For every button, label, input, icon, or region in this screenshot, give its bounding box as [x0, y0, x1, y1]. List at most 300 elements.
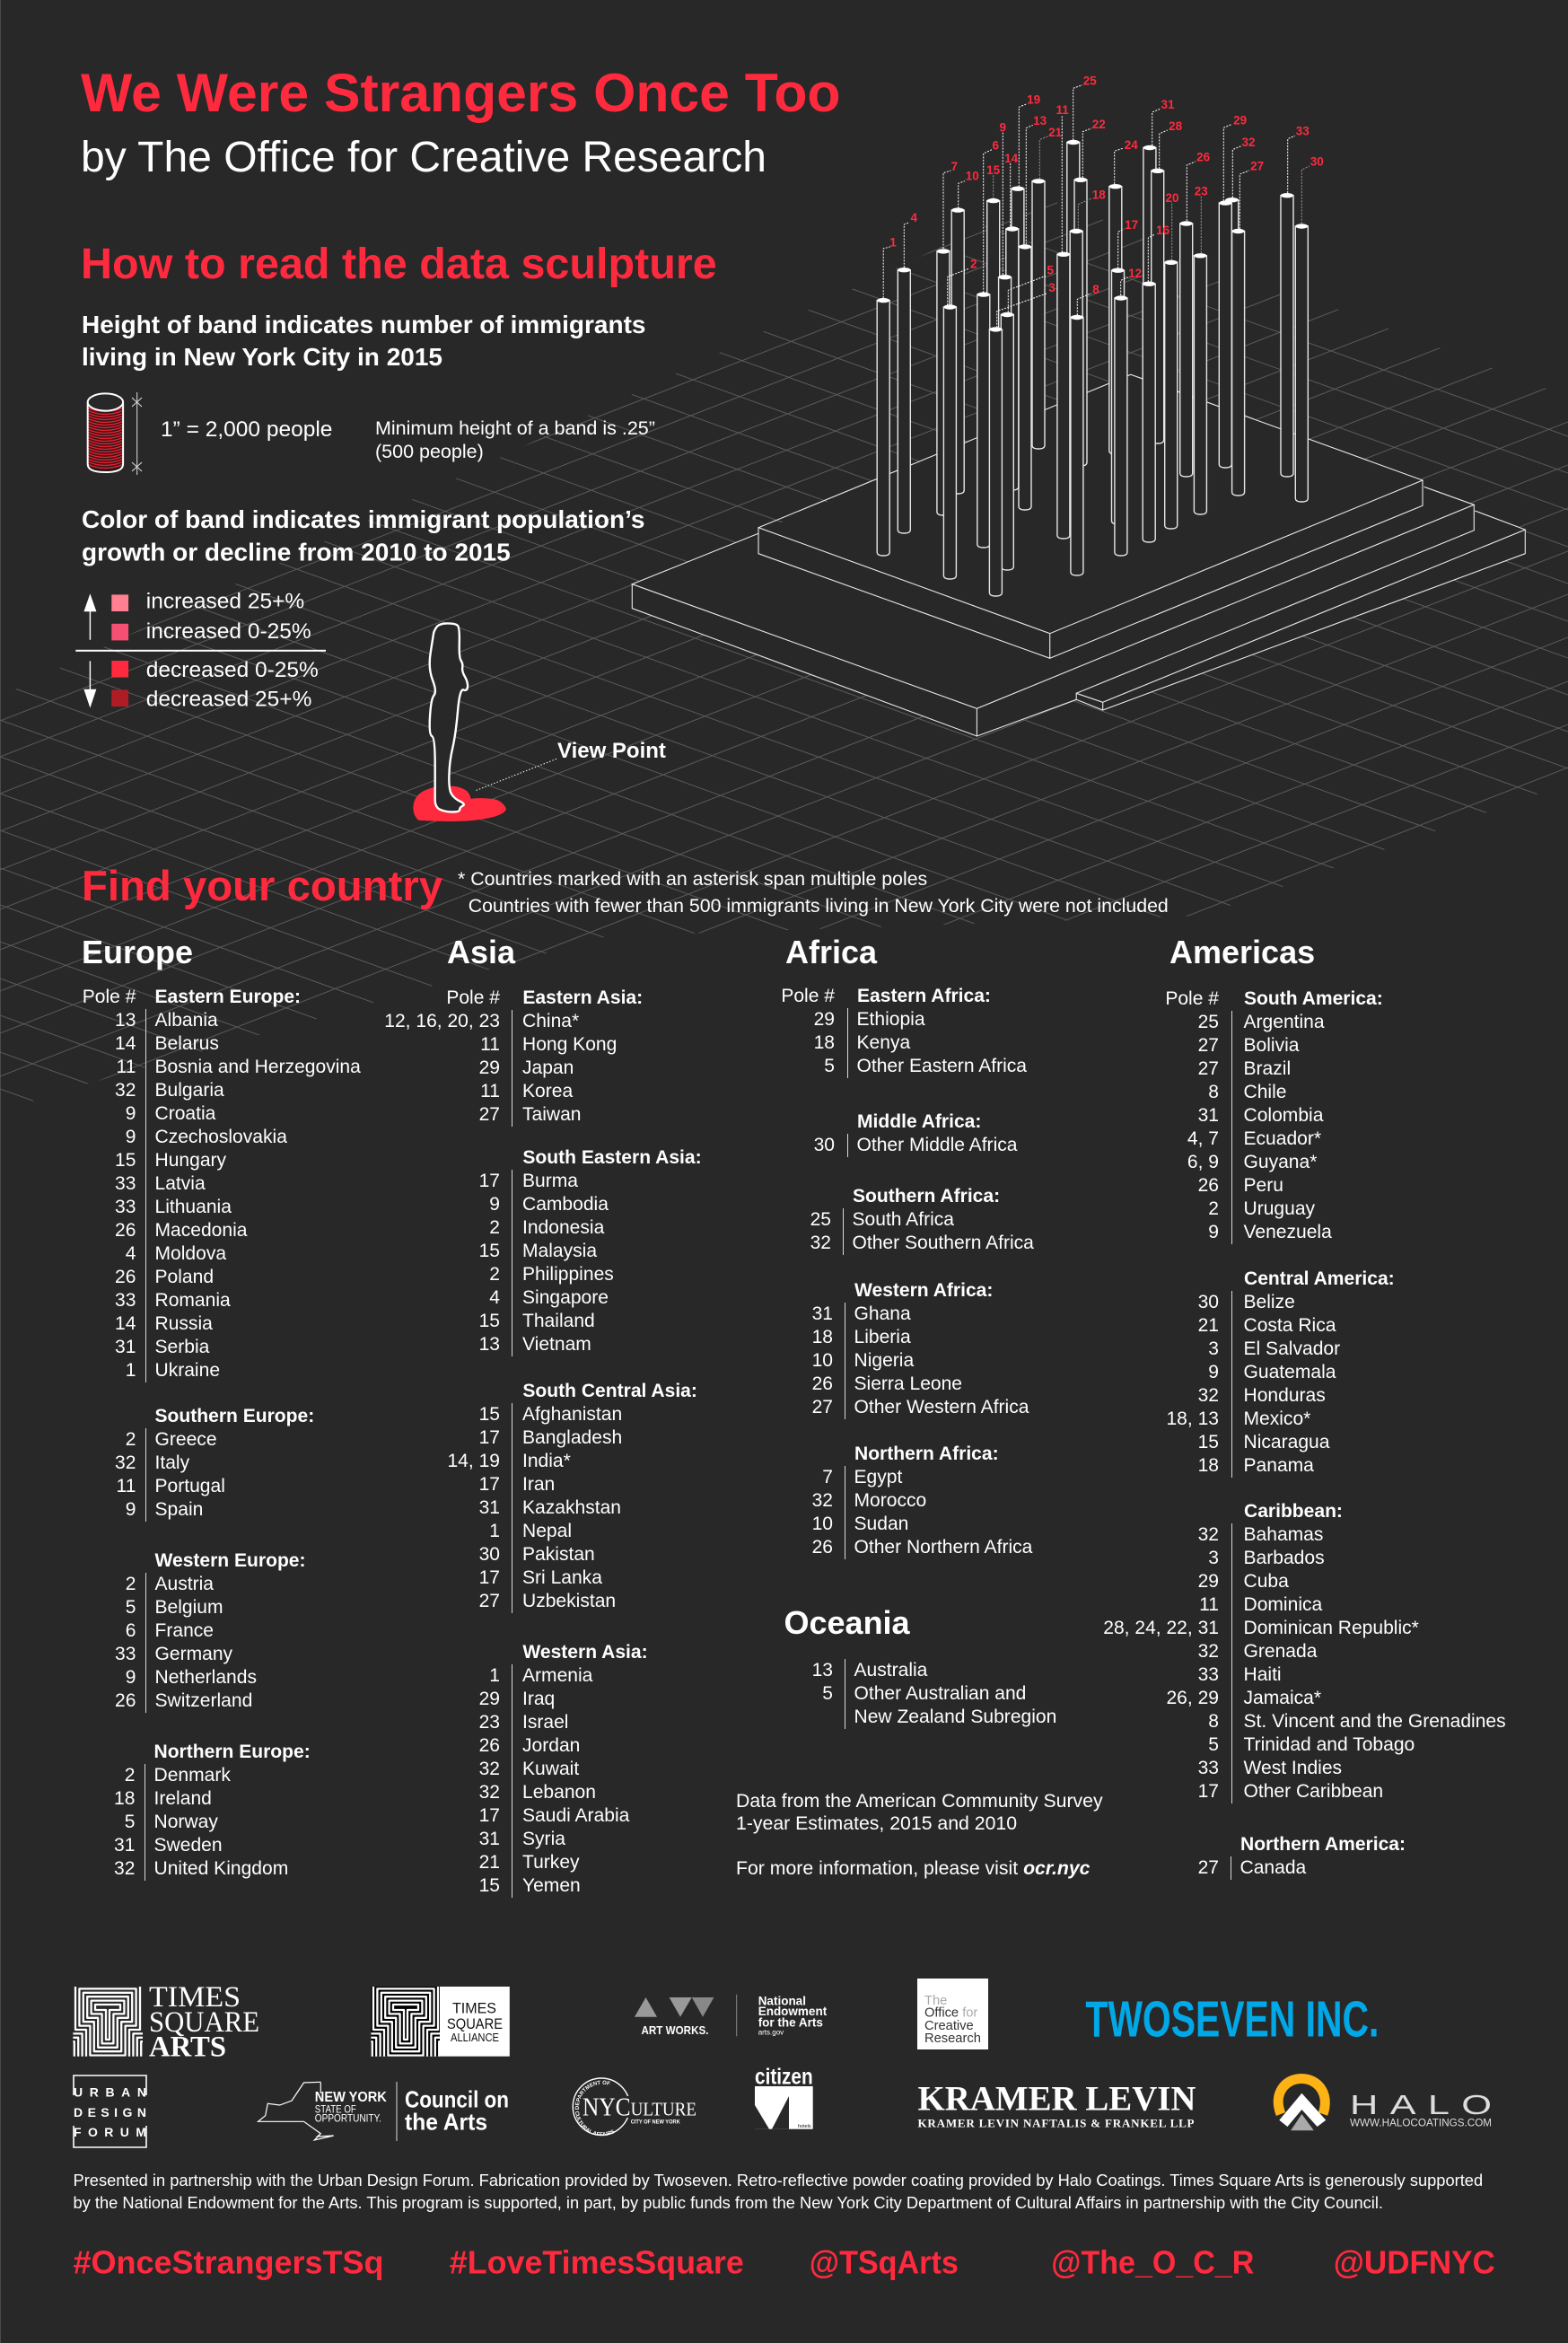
pole 13: 13 [1033, 114, 1047, 127]
list: South Central Asia: Pakistan [522, 1544, 595, 1565]
text: 26 [115, 1220, 136, 1241]
text: 33 [115, 1290, 136, 1311]
text: 28, 24, 22, 31 [1103, 1618, 1219, 1638]
logo: new york council on the arts: OPPORTUNITY. [315, 2111, 381, 2124]
list: Western Europe: France [154, 1620, 214, 1641]
text: 12, 16, 20, 23 [384, 1011, 500, 1031]
logo: times square arts [73, 1987, 258, 2057]
legend: colour scale: decreased 0-25% [146, 658, 319, 682]
list: Central America: Central America: [1244, 1268, 1395, 1289]
heading: Asia: Asia [447, 934, 515, 970]
pole 32 [1226, 136, 1256, 463]
heading: Europe: Europe [82, 934, 193, 970]
legend: colour scale: increased 25+% [146, 589, 304, 614]
text: 14 [115, 1033, 136, 1054]
list: Northern Africa: Morocco [854, 1490, 926, 1510]
text: 32 [1198, 1641, 1219, 1662]
text: 32 [810, 1233, 831, 1253]
text: 27 [479, 1591, 500, 1611]
list: Central America: Panama [1244, 1455, 1314, 1476]
hashtags: #OnceStrangersTSq [74, 2244, 384, 2280]
text: 10 [812, 1350, 833, 1371]
pole 31 [1143, 98, 1175, 417]
list: Caribbean: Trinidad and Tobago [1244, 1734, 1415, 1755]
list: Caribbean [1103, 1501, 1506, 1803]
list: South America: Chile [1244, 1082, 1286, 1102]
text: 17 [479, 1567, 500, 1588]
text: 5 [126, 1597, 136, 1618]
text: Pole # [446, 987, 500, 1008]
text: 33 [115, 1644, 136, 1664]
list: Caribbean: Jamaica* [1244, 1688, 1321, 1708]
text: 29 [814, 1009, 835, 1030]
pole 4: 4 [911, 211, 918, 224]
list: Central America: El Salvador [1244, 1338, 1340, 1359]
logo: office for creative research: Creative [924, 2019, 974, 2033]
list: South Central Asia: Sri Lanka [522, 1567, 602, 1588]
pole 33 [1281, 124, 1310, 477]
list: Caribbean: Bahamas [1244, 1524, 1323, 1545]
logo: citizenM: citizen [755, 2065, 813, 2090]
list: Northern America [1198, 1834, 1406, 1880]
text: 6 [126, 1620, 136, 1641]
text: 9 [126, 1127, 136, 1147]
list: Southern Europe: Portugal [154, 1476, 225, 1496]
logo: nyc culture [573, 2077, 696, 2137]
text: 5 [824, 1056, 835, 1076]
logo: urban design forum: FORUM [74, 2125, 146, 2139]
list: South Eastern Asia: Burma [522, 1171, 578, 1191]
pole 17: 17 [1125, 218, 1138, 232]
pole 3: 3 [1048, 281, 1056, 294]
list: Eastern Europe: Romania [154, 1290, 231, 1311]
list: Western Asia: Western Asia: [522, 1642, 648, 1663]
text: 31 [114, 1835, 135, 1856]
logo: citizenM [755, 2065, 813, 2129]
subtitle: by The Office for Creative Research [81, 134, 766, 181]
list: Northern Africa [812, 1444, 1032, 1559]
list: Eastern Europe: Croatia [154, 1103, 215, 1124]
list: Western Africa: Ghana [854, 1303, 911, 1324]
pole 26: 26 [1196, 151, 1211, 163]
logo: kramer levin: KRAMER LEVIN NAFTALIS & FRANKEL LLP [917, 2116, 1195, 2129]
list: Southern Africa: Other Southern Africa [853, 1233, 1034, 1253]
list: Eastern Europe: Hungary [154, 1150, 226, 1171]
list: Eastern Europe: Serbia [154, 1337, 209, 1357]
pole 15: 15 [986, 163, 1001, 177]
list: Eastern Europe [83, 987, 361, 1382]
pole 14 [1004, 152, 1019, 490]
list: Eastern Europe: Eastern Europe: [154, 987, 301, 1007]
text: 23 [479, 1712, 500, 1733]
legend: colour scale: increased 0-25% [146, 619, 311, 644]
text: 17 [479, 1474, 500, 1495]
icon: view point heart [413, 786, 506, 821]
list: South America: Brazil [1244, 1058, 1291, 1079]
list: Western Europe: Switzerland [154, 1690, 252, 1711]
list: Middle Africa: Middle Africa: [857, 1111, 981, 1132]
text: 31 [479, 1829, 500, 1849]
list: Western Asia: Israel [522, 1712, 568, 1733]
text: 17 [479, 1805, 500, 1826]
text: 13 [115, 1010, 136, 1031]
text: 27 [1198, 1857, 1219, 1878]
text: 17 [479, 1171, 500, 1191]
text: 8 [1208, 1711, 1219, 1732]
text: 2 [125, 1765, 135, 1786]
pole 31: 31 [1161, 98, 1175, 111]
list: Oceania: Australia [854, 1660, 927, 1680]
pole 10: 10 [966, 169, 979, 183]
list: Eastern Asia: Eastern Asia: [522, 987, 643, 1008]
pole 18: 18 [1092, 189, 1106, 201]
text: 14 [115, 1313, 136, 1334]
list: Western Europe: Netherlands [154, 1667, 257, 1688]
text: 29 [479, 1689, 500, 1709]
heading: find your country: Find your country [82, 863, 443, 910]
pole 2 [943, 257, 977, 579]
text: 15 [479, 1241, 500, 1261]
list: Northern Europe: Norway [154, 1812, 218, 1832]
text: 26 [115, 1267, 136, 1287]
list: Northern America: Northern America: [1240, 1834, 1406, 1855]
text: 32 [479, 1782, 500, 1803]
pole 1 [877, 235, 897, 556]
pole 21 [1032, 126, 1063, 449]
pole 25: 25 [1083, 74, 1097, 88]
text: 15 [115, 1150, 136, 1171]
list: South Central Asia: Uzbekistan [522, 1591, 616, 1611]
logo: times square alliance: TIMES [452, 2000, 496, 2016]
list: Caribbean: Barbados [1244, 1548, 1325, 1568]
list: Southern Africa: Southern Africa: [853, 1186, 1000, 1207]
text: 33 [115, 1173, 136, 1194]
hashtags: @UDFNYC [1334, 2244, 1495, 2280]
text: 9 [1208, 1222, 1219, 1242]
pole 25 [1067, 74, 1097, 412]
text: 32 [114, 1858, 135, 1879]
list: Middle Africa: Other Middle Africa [856, 1135, 1017, 1155]
list: Caribbean: Caribbean: [1244, 1501, 1343, 1522]
list: Western Africa: Other Western Africa [854, 1397, 1029, 1417]
note: countries: Countries with fewer than 500 immigrants living in New York City were not included [469, 895, 1169, 917]
text: data source: Data from the American Community Survey [736, 1790, 1103, 1812]
pole 21: 21 [1048, 126, 1063, 139]
text: 2 [489, 1217, 500, 1238]
logo: urban design forum: DESIGN [74, 2105, 146, 2119]
text: 18 [814, 1032, 835, 1053]
list: Western Africa: Nigeria [854, 1350, 914, 1371]
list: Western Europe: Western Europe: [154, 1550, 306, 1571]
text: 33 [1198, 1758, 1219, 1778]
list: South America: Venezuela [1244, 1222, 1332, 1242]
text: 31 [115, 1337, 136, 1357]
list: Western Europe [115, 1550, 306, 1713]
logo: nyc culture: DEPARTMENT OF [574, 2081, 610, 2110]
text: 18 [1198, 1455, 1219, 1476]
list: Eastern Europe: Latvia [154, 1173, 206, 1194]
heading: Africa: Africa [785, 934, 877, 970]
logo: times square alliance [371, 1987, 510, 2057]
list: Caribbean: West Indies [1244, 1758, 1342, 1778]
pole 32: 32 [1241, 136, 1256, 149]
list: Western Asia: Lebanon [522, 1782, 596, 1803]
hashtags: @The_O_C_R [1051, 2244, 1255, 2280]
logo: new york council on the arts: the Arts [405, 2109, 487, 2136]
logo: urban design forum: URBAN [74, 2084, 146, 2099]
list: Southern Europe: Spain [154, 1499, 203, 1520]
list: Central America: Guatemala [1244, 1362, 1336, 1382]
logo: national endowment for the arts: Endowment [758, 2005, 828, 2018]
text: 11 [480, 1081, 500, 1101]
logo: office for creative research: Office for [924, 2006, 977, 2021]
list: Northern Europe: Ireland [154, 1788, 212, 1809]
list: Caribbean: St. Vincent and the Grenadines [1244, 1711, 1506, 1732]
logo: nyc culture: NYCULTURE [583, 2094, 696, 2122]
text: 17 [479, 1427, 500, 1448]
pole 10 [951, 169, 979, 494]
list: Eastern Europe: Moldova [154, 1243, 226, 1264]
text: 32 [115, 1080, 136, 1101]
pole 20 [1165, 191, 1179, 529]
text: 25 [810, 1209, 831, 1230]
legend: colour scale [75, 589, 326, 711]
list: South Central Asia: South Central Asia: [522, 1381, 697, 1401]
list: South Central Asia [447, 1381, 697, 1613]
text: 2 [126, 1574, 136, 1594]
list: Eastern Europe: Russia [154, 1313, 213, 1334]
list: Central America: Honduras [1244, 1385, 1326, 1406]
text: 17 [1198, 1781, 1219, 1802]
logo: office for creative research [917, 1979, 988, 2049]
list: Northern Europe: Northern Europe: [154, 1742, 311, 1762]
list: Eastern Europe: Poland [154, 1267, 214, 1287]
text: 11 [117, 1476, 136, 1496]
list: South Eastern Asia: Philippines [522, 1264, 614, 1285]
pole 24 [1109, 138, 1138, 454]
text: 5 [125, 1812, 135, 1832]
list: South Central Asia: Nepal [522, 1521, 572, 1541]
hashtags: @TSqArts [810, 2244, 959, 2280]
pole 12: 12 [1128, 267, 1142, 280]
list: Northern Africa: Sudan [854, 1514, 908, 1533]
list: Western Africa: Liberia [854, 1327, 911, 1347]
list: Central America: Belize [1244, 1292, 1295, 1312]
text: 2 [489, 1264, 500, 1285]
list: South Eastern Asia: Singapore [522, 1287, 609, 1308]
icon: scale cylinder [87, 392, 142, 475]
list: South America: Guyana* [1244, 1152, 1317, 1172]
text: data source [736, 1790, 1103, 1879]
list: Western Africa: Sierra Leone [854, 1373, 962, 1394]
pole 16: 16 [1156, 224, 1170, 237]
text: 9 [1208, 1362, 1219, 1382]
pole 19: 19 [1027, 93, 1040, 106]
text: height of band: living in New York City in 2015 [82, 343, 442, 371]
list: Northern Africa: Other Northern Africa [854, 1537, 1032, 1557]
text: 13 [812, 1660, 833, 1680]
list: Eastern Europe: Belarus [154, 1033, 219, 1054]
list: South America [1165, 988, 1383, 1244]
list: Eastern Europe: Albania [154, 1010, 218, 1031]
text: 25 [1198, 1012, 1219, 1032]
pole 27: 27 [1250, 160, 1264, 172]
list: Western Asia [479, 1642, 648, 1898]
pole 27 [1232, 160, 1264, 496]
pole 29: 29 [1233, 113, 1247, 127]
pole 20: 20 [1165, 191, 1179, 205]
logo: national endowment for the arts [635, 1994, 828, 2037]
text: 15 [479, 1404, 500, 1425]
list: Eastern Europe: Ukraine [154, 1360, 220, 1381]
list: Western Europe: Austria [154, 1574, 214, 1594]
pole 28 [1152, 119, 1183, 443]
list: Eastern Europe: Macedonia [154, 1220, 247, 1241]
pole 26 [1180, 151, 1211, 477]
list: Western Asia: Turkey [522, 1852, 580, 1873]
pole 22 [1074, 118, 1106, 466]
list: South America: Argentina [1244, 1012, 1325, 1032]
list: South Central Asia: India* [522, 1451, 571, 1471]
text: 1 [489, 1521, 500, 1541]
text: 31 [812, 1303, 833, 1324]
heading: how to read: How to read the data sculpture [81, 240, 717, 288]
pole 19 [1012, 93, 1040, 454]
pole 30: 30 [1310, 154, 1324, 169]
logo: national endowment for the arts: arts.gov [758, 2029, 784, 2037]
text: 32 [479, 1759, 500, 1779]
logo: times square alliance: ALLIANCE [451, 2031, 499, 2044]
list: Western Europe: Germany [154, 1644, 232, 1664]
text: 26 [812, 1373, 833, 1394]
list: Western Asia: Iraq [522, 1689, 555, 1709]
pole 33: 33 [1296, 124, 1310, 138]
text: 26 [1198, 1175, 1219, 1196]
text: 27 [479, 1104, 500, 1125]
pole 14: 14 [1004, 152, 1019, 165]
pole 12 [1115, 267, 1142, 556]
logo: nyc culture: CULTURAL AFFAIRS [575, 2111, 614, 2137]
text: 18, 13 [1166, 1408, 1219, 1429]
list: South America: Bolivia [1244, 1035, 1300, 1056]
text: minimum height: Minimum height of a band is .25” [375, 417, 655, 439]
list: Southern Europe: Southern Europe: [154, 1406, 314, 1426]
hashtags [74, 2244, 1495, 2280]
pole 11 [1056, 103, 1070, 539]
list: Western Asia: Yemen [522, 1875, 581, 1896]
logo: urban design forum [74, 2075, 146, 2147]
list: South Central Asia: Bangladesh [522, 1427, 622, 1448]
text: 11 [117, 1057, 136, 1077]
text: 4, 7 [1187, 1128, 1219, 1149]
text: 15 [1198, 1432, 1219, 1452]
list: South Eastern Asia: Vietnam [522, 1334, 591, 1355]
logo: halo [1278, 2079, 1503, 2130]
pole 22: 22 [1092, 118, 1106, 131]
text: 4 [489, 1287, 500, 1308]
pole 9 [999, 120, 1012, 541]
pole 7: 7 [951, 160, 958, 173]
logo: times square alliance: SQUARE [447, 2015, 503, 2032]
pole 28: 28 [1169, 119, 1183, 133]
text: 9 [126, 1103, 136, 1124]
list: Eastern Europe: Bosnia and Herzegovina [154, 1057, 361, 1077]
text: 21 [479, 1852, 500, 1873]
platform [632, 374, 1525, 736]
list: Northern Africa: Egypt [854, 1467, 902, 1487]
text: 1 [489, 1665, 500, 1686]
list: Southern Europe: Italy [154, 1452, 189, 1473]
text: Pole # [1165, 988, 1219, 1009]
text: 9 [126, 1667, 136, 1688]
list: South Central Asia: Iran [522, 1474, 555, 1495]
text: scale: 1” = 2,000 people [161, 417, 332, 442]
text: 18 [812, 1327, 833, 1347]
text: 9 [126, 1499, 136, 1520]
text: color of band: growth or decline from 2010 to 2015 [82, 539, 511, 566]
text: 30 [1198, 1292, 1219, 1312]
list: Caribbean: Grenada [1244, 1641, 1317, 1662]
pole 18 [1070, 189, 1106, 496]
list: Eastern Asia: Taiwan [522, 1104, 582, 1125]
text: height of band: Height of band indicates number of immigrants [82, 311, 646, 338]
list: South America: Colombia [1244, 1105, 1323, 1126]
text: 14, 19 [447, 1451, 500, 1471]
list: Eastern Europe: Bulgaria [154, 1080, 224, 1101]
text: 13 [479, 1334, 500, 1355]
text: credits: Presented in partnership with the Urban Design Forum. Fabrication provided by Twoseven. Retro-reflective powder coating provided by Halo Coatings. Times Square Arts is generously supported [74, 2171, 1483, 2189]
pole 23: 23 [1195, 185, 1208, 197]
text: 5 [822, 1683, 833, 1704]
text: 31 [1198, 1105, 1219, 1126]
list: Central America: Nicaragua [1244, 1432, 1329, 1452]
list: Eastern Asia: Japan [522, 1057, 574, 1078]
text: credits: by the National Endowment for the Arts. This program is supported, in part, by public funds from the New York City Department of Cultural Affairs in partnership with the City Council. [74, 2193, 1383, 2212]
text: 11 [1199, 1594, 1219, 1615]
list: Northern Europe: United Kingdom [154, 1858, 288, 1879]
pole 3 [989, 281, 1056, 596]
text: 10 [812, 1514, 833, 1533]
text: 27 [1198, 1058, 1219, 1079]
text: 2 [1208, 1198, 1219, 1219]
text: 31 [479, 1497, 500, 1518]
list: Caribbean: Dominican Republic* [1244, 1618, 1419, 1638]
pole 30 [1295, 154, 1324, 502]
list: Southern Europe: Greece [154, 1429, 217, 1450]
heading: Americas: Americas [1169, 934, 1315, 970]
text: 8 [1208, 1082, 1219, 1102]
list: Southern Africa [810, 1186, 1034, 1255]
logo: new york council on the arts: NEW YORK [315, 2090, 387, 2105]
text: 29 [1198, 1571, 1219, 1592]
list: South Eastern Asia: Indonesia [522, 1217, 604, 1238]
logo: times square arts: TIMES [149, 1981, 241, 2014]
text: 11 [480, 1034, 500, 1055]
icon: arrow down [84, 661, 95, 706]
list: Caribbean: Other Caribbean [1244, 1781, 1383, 1802]
list: Northern Europe: Denmark [154, 1765, 231, 1786]
note: countries: * Countries marked with an asterisk span multiple poles [458, 868, 927, 890]
list: Southern Africa: South Africa [853, 1209, 954, 1230]
list: Eastern Asia: China* [522, 1011, 579, 1031]
pole 6: 6 [993, 138, 1000, 153]
text: 32 [1198, 1524, 1219, 1545]
pole 5 [1001, 264, 1055, 570]
text: 1 [126, 1360, 136, 1381]
list: Eastern Asia [384, 987, 643, 1127]
text: 26 [115, 1690, 136, 1711]
text: 33 [1198, 1664, 1219, 1685]
